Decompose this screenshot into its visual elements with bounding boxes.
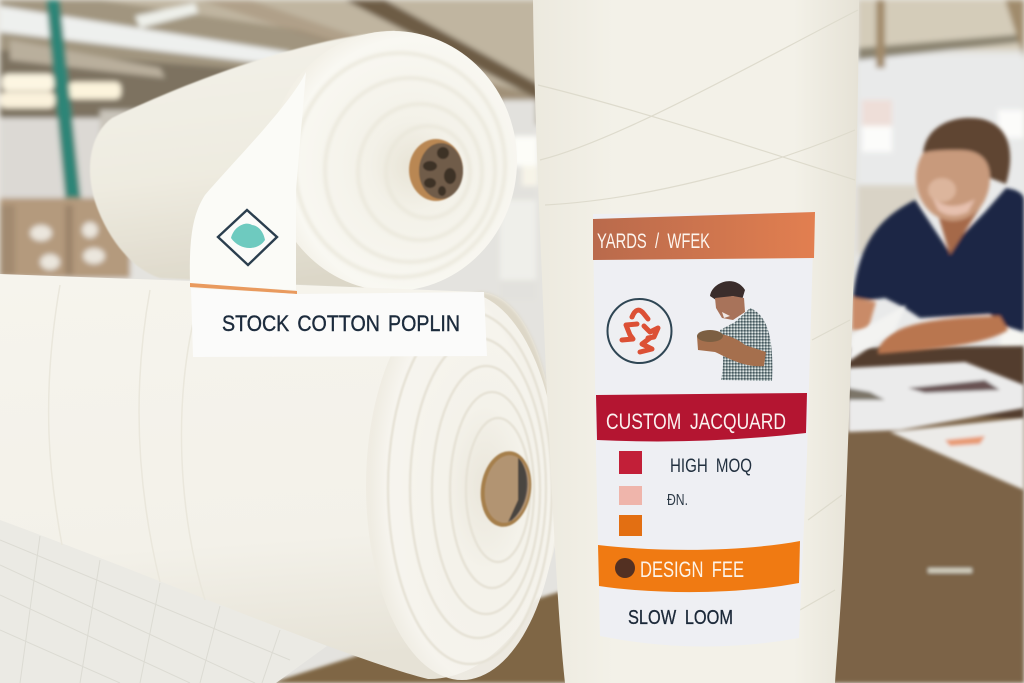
person in background	[852, 118, 1024, 354]
cardboard core	[409, 139, 463, 201]
icon: circled thread symbol	[608, 299, 672, 363]
upper fabric roll	[90, 31, 517, 291]
band: custom jacquard	[596, 393, 807, 441]
legend row: high MOQ	[619, 451, 752, 477]
legend row: N.N.	[619, 486, 688, 509]
legend row: high MOQ: HIGH MOQ	[670, 456, 752, 477]
worker inspecting sample	[697, 281, 772, 381]
legend swatch: orange	[619, 515, 642, 536]
fabric tag: stock cotton poplin	[190, 72, 487, 357]
woven mat lower left	[0, 515, 327, 683]
header band: yards per week	[593, 212, 815, 260]
head and hair	[916, 118, 1010, 221]
papers on table	[848, 305, 1024, 490]
label panel	[191, 288, 487, 357]
neck	[935, 200, 985, 255]
roll end face	[269, 31, 517, 291]
legend row: N.N.: ÐN.	[667, 492, 688, 509]
tag title: STOCK COTTON POPLIN	[222, 311, 460, 336]
slow loom note: SLOW LOOM	[628, 607, 733, 629]
cardboard core	[476, 448, 536, 530]
forearms	[852, 297, 876, 330]
lower fabric roll	[0, 274, 559, 680]
band: design fee: DESIGN FEE	[640, 557, 744, 582]
standing column roll	[533, 0, 859, 683]
label panel	[593, 212, 814, 647]
orange divider	[190, 283, 297, 294]
header band: yards per week: YARDS / WFEK	[597, 230, 710, 253]
shaded top of roll end	[470, 292, 559, 510]
roll end face	[366, 292, 558, 680]
table surface	[270, 346, 1024, 683]
tag strip	[190, 72, 306, 290]
spec label on column	[593, 212, 815, 647]
shirt	[853, 188, 1024, 332]
band: custom jacquard: CUSTOM JACQUARD	[606, 409, 786, 434]
icon: diamond swatch	[218, 210, 277, 265]
band: design fee	[598, 541, 800, 592]
